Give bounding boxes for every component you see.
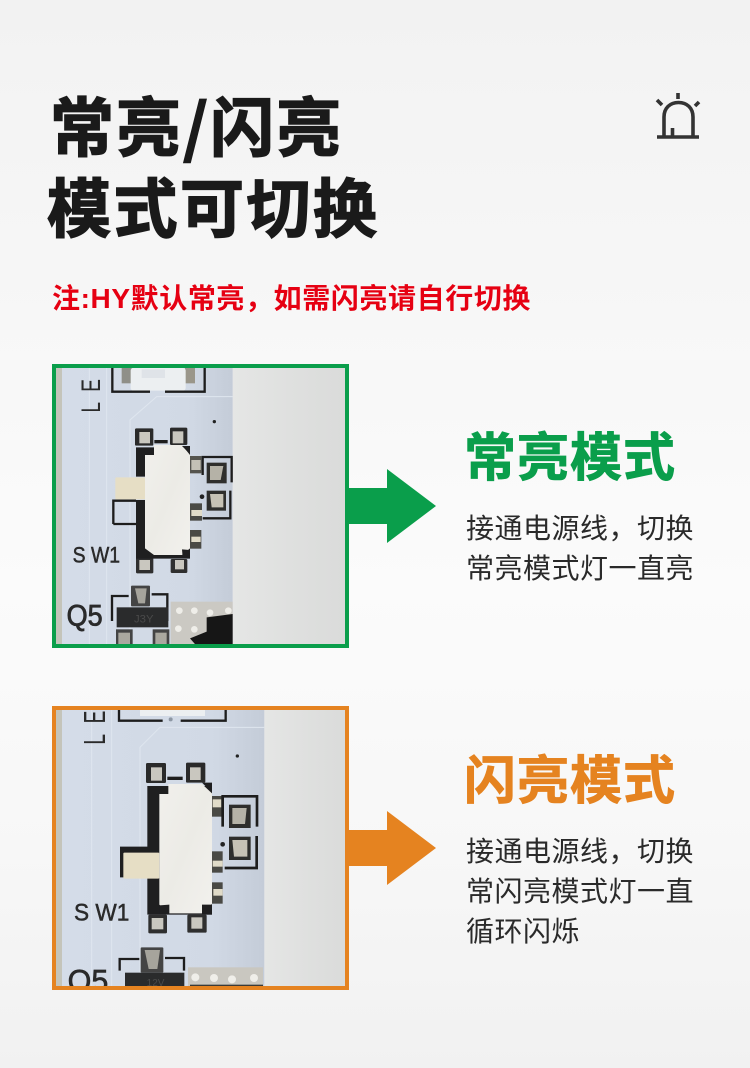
slide switch: [120, 763, 223, 933]
arrow: orange: [349, 811, 436, 885]
description: flashing mode: 循环闪烁: [466, 910, 580, 950]
LED module: [112, 368, 205, 392]
description: steady mode: 常亮模式灯一直亮: [466, 547, 694, 587]
LED module: [119, 709, 226, 721]
heading: steady mode: 常亮模式: [464, 416, 676, 491]
transistor Q5: J3Y: [134, 613, 154, 625]
note: red text: 注:HY默认常亮，如需闪亮请自行切换: [52, 283, 531, 314]
description: steady mode: [466, 507, 694, 587]
heading: flashing mode: 闪亮模式: [464, 739, 676, 814]
transistor Q5: 12V: [147, 978, 165, 989]
icon: alarm beacon: [656, 93, 700, 139]
description: flashing mode: [466, 830, 694, 950]
title: 常亮/闪亮: [50, 78, 343, 170]
right pads: [220, 796, 257, 868]
transistor Q5: [120, 947, 184, 989]
green frame: [54, 366, 347, 646]
description: flashing mode: 常闪亮模式灯一直: [466, 870, 694, 910]
panel: flashing mode photo: [52, 706, 349, 990]
Q5 silkscreen: Q5: [67, 599, 103, 632]
metal shield plate: [171, 602, 233, 646]
slide switch: [113, 428, 202, 573]
metal shield plate: [188, 967, 263, 988]
title: [47, 78, 380, 251]
panel: steady mode photo: [52, 364, 349, 648]
right pads: [200, 457, 232, 518]
arrow: green: [349, 469, 436, 543]
title: 模式可切换: [47, 159, 380, 251]
SW1 silkscreen: S W1: [74, 900, 129, 927]
orange frame: [54, 708, 347, 988]
description: steady mode: 接通电源线，切换: [466, 507, 694, 547]
description: flashing mode: 接通电源线，切换: [466, 830, 694, 870]
SW1 silkscreen: S W1: [73, 542, 120, 567]
transistor Q5: [112, 586, 169, 646]
